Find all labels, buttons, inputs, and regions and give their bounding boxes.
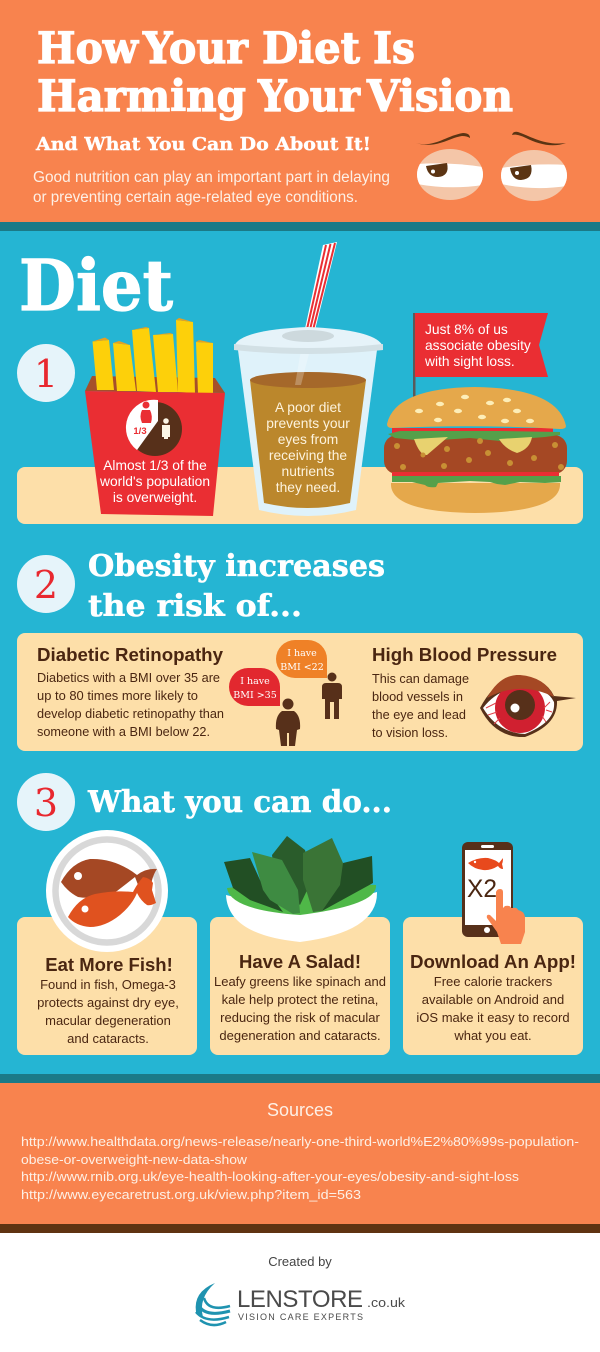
drink text bbox=[266, 400, 350, 495]
icon: lenstore swirl bbox=[196, 1283, 230, 1325]
high blood pressure text: This can damage bbox=[372, 671, 469, 686]
salad text: Leafy greens like spinach and bbox=[214, 974, 386, 989]
heading: what you can do: What you can do... bbox=[87, 785, 392, 820]
panel: obesity risks bbox=[17, 633, 583, 751]
app text: Download An App! bbox=[410, 951, 576, 972]
icon: salad bowl bbox=[224, 836, 377, 942]
speech bubbles and people bbox=[229, 640, 342, 746]
intro text: or preventing certain age-related eye conditions. bbox=[33, 189, 358, 206]
drink text: A poor diet bbox=[275, 400, 341, 415]
number badge 1: 1 bbox=[34, 352, 58, 396]
speech bubbles and people: BMI <22 bbox=[280, 662, 324, 673]
drink text: prevents your bbox=[266, 416, 350, 431]
source links bbox=[21, 1134, 579, 1202]
statistic text: world's population bbox=[99, 474, 210, 489]
salad text: degeneration and cataracts. bbox=[219, 1028, 381, 1043]
high blood pressure text: the eye and lead bbox=[372, 707, 466, 722]
heading: Diet: Diet bbox=[19, 244, 173, 327]
salad text bbox=[214, 951, 386, 1043]
salad text: kale help protect the retina, bbox=[222, 992, 378, 1007]
diabetic retinopathy text: Diabetics with a BMI over 35 are bbox=[37, 670, 220, 685]
speech bubbles and people: I have bbox=[287, 648, 317, 659]
drink cup bbox=[234, 242, 383, 516]
title: Harming bbox=[37, 72, 246, 122]
app text: iOS make it easy to record bbox=[416, 1010, 570, 1025]
logo: Lenstore bbox=[196, 1283, 406, 1325]
pie chart: one third bbox=[126, 400, 182, 456]
flag bbox=[413, 313, 548, 397]
heading: obesity increases the risk bbox=[88, 549, 385, 624]
flag: with sight loss. bbox=[424, 354, 515, 369]
drink text: eyes from bbox=[278, 432, 338, 447]
logo: Lenstore: VISION CARE EXPERTS bbox=[238, 1312, 363, 1322]
drink text: receiving the bbox=[269, 448, 347, 463]
app text: Free calorie trackers bbox=[434, 974, 553, 989]
icon: phone and hand: X2 bbox=[467, 875, 497, 903]
title: Your bbox=[142, 24, 249, 74]
created by: Created by bbox=[268, 1254, 332, 1269]
icon: bloodshot eye bbox=[480, 675, 576, 737]
title: Your bbox=[257, 72, 361, 122]
heading: obesity increases the risk: the risk of... bbox=[88, 589, 302, 624]
blue main panel bbox=[0, 231, 600, 1074]
card: download an app bbox=[403, 842, 583, 1055]
source links: http://www.eyecaretrust.org.uk/view.php?item_id=563 bbox=[21, 1187, 361, 1202]
tray bbox=[17, 467, 583, 524]
number badge 3: 3 bbox=[34, 781, 58, 825]
source links: http://www.healthdata.org/news-release/nearly-one-third-world%E2%80%99s-population- bbox=[21, 1134, 579, 1149]
card: have a salad bbox=[210, 836, 390, 1055]
diabetic retinopathy text: Diabetic Retinopathy bbox=[37, 644, 224, 665]
intro text bbox=[33, 169, 390, 206]
app text: available on Android and bbox=[422, 992, 564, 1007]
number badge 1 bbox=[17, 344, 75, 402]
sources panel bbox=[0, 1074, 600, 1233]
diabetic retinopathy text bbox=[37, 644, 224, 739]
header divider band bbox=[0, 222, 600, 231]
app text bbox=[410, 951, 576, 1043]
burger layers bbox=[391, 483, 560, 513]
high blood pressure text bbox=[372, 644, 557, 740]
source links: http://www.rnib.org.uk/eye-health-looking-after-your-eyes/obesity-and-sight-loss bbox=[21, 1169, 520, 1184]
fish text: Eat More Fish! bbox=[45, 954, 173, 975]
flag: Just 8% of us bbox=[425, 322, 508, 337]
high blood pressure text: blood vessels in bbox=[372, 689, 463, 704]
title: Vision bbox=[366, 72, 513, 122]
statistic text bbox=[99, 458, 210, 505]
salad text: reducing the risk of macular bbox=[220, 1010, 381, 1025]
number badge 2 bbox=[17, 555, 75, 613]
fries bbox=[92, 320, 213, 393]
burger with flag bbox=[384, 313, 567, 513]
diabetic retinopathy text: up to 80 times more likely to bbox=[37, 688, 198, 703]
source links: obese-or-overweight-new-data-show bbox=[21, 1152, 248, 1167]
sources heading: Sources bbox=[267, 1100, 333, 1120]
subtitle: And What You Can Do About It! bbox=[35, 134, 371, 155]
number badge 2: 2 bbox=[34, 563, 58, 607]
card: eat more fish bbox=[17, 830, 197, 1055]
diabetic retinopathy text: someone with a BMI below 22. bbox=[37, 724, 210, 739]
title: Is bbox=[373, 24, 415, 74]
statistic text: is overweight. bbox=[113, 490, 197, 505]
speech bubbles and people: I have bbox=[240, 676, 270, 687]
app text: what you eat. bbox=[453, 1028, 532, 1043]
salad text: Have A Salad! bbox=[239, 951, 361, 972]
fish text: protects against dry eye, bbox=[37, 995, 179, 1010]
fish text bbox=[37, 954, 179, 1046]
number badge 3 bbox=[17, 773, 75, 831]
header panel bbox=[0, 0, 600, 222]
high blood pressure text: High Blood Pressure bbox=[372, 644, 557, 665]
diabetic retinopathy text: develop diabetic retinopathy than bbox=[37, 706, 224, 721]
drink text: nutrients bbox=[282, 464, 335, 479]
fish text: macular degeneration bbox=[45, 1013, 171, 1028]
speech bubbles and people: BMI >35 bbox=[233, 690, 277, 701]
heading: obesity increases the risk: Obesity increases bbox=[88, 549, 385, 584]
icon: plate with fish bbox=[46, 830, 168, 952]
icon: tired eyes bbox=[415, 132, 567, 202]
fries box with statistic bbox=[85, 318, 225, 516]
title bbox=[37, 24, 513, 122]
logo: Lenstore: LENSTORE bbox=[237, 1286, 363, 1313]
straw bbox=[303, 242, 337, 338]
pie chart: one third: 1/3 bbox=[133, 426, 147, 437]
drink text: they need. bbox=[276, 480, 340, 495]
intro text: Good nutrition can play an important part in delaying bbox=[33, 169, 390, 186]
fish text: and cataracts. bbox=[67, 1031, 149, 1046]
statistic text: Almost 1/3 of the bbox=[103, 458, 207, 473]
fish text: Found in fish, Omega-3 bbox=[40, 977, 176, 992]
title: Diet bbox=[262, 24, 360, 74]
high blood pressure text: to vision loss. bbox=[372, 725, 448, 740]
flag: associate obesity bbox=[425, 338, 531, 353]
logo: Lenstore: .co.uk bbox=[367, 1295, 406, 1310]
icon: phone and hand bbox=[462, 842, 525, 944]
title: How bbox=[37, 24, 139, 74]
